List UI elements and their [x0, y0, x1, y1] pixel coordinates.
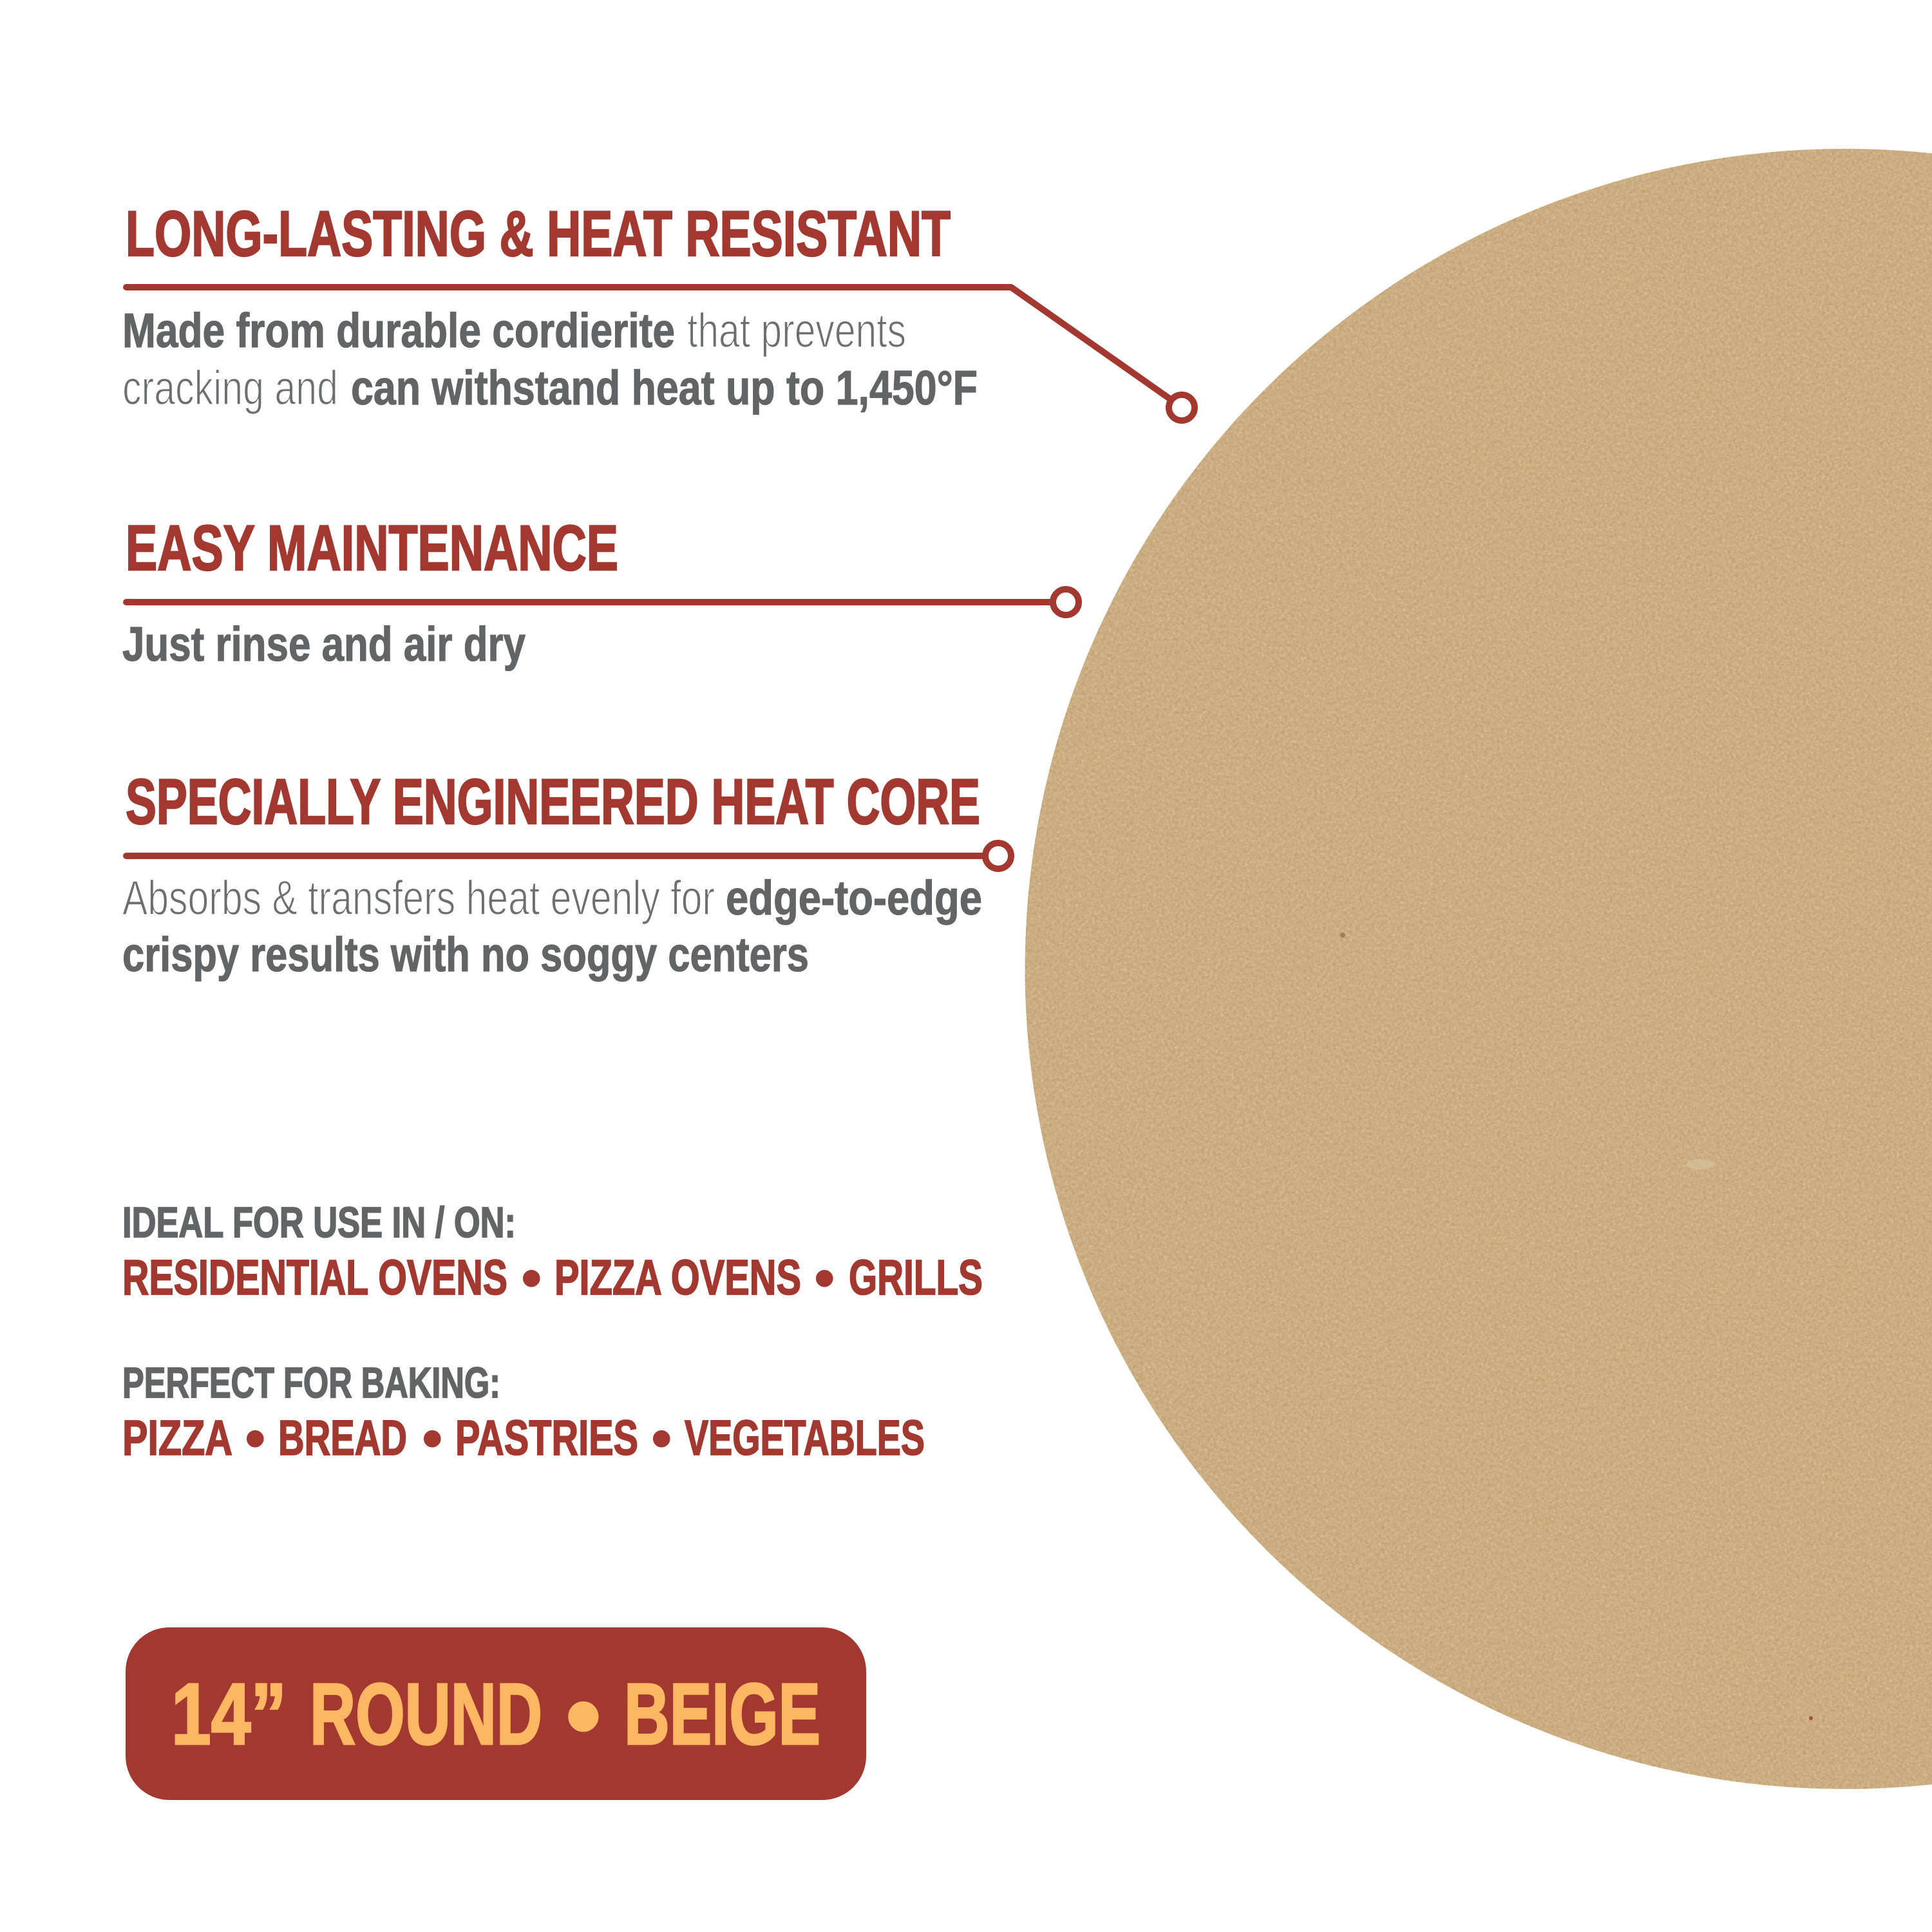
- list: foods: [122, 1405, 925, 1472]
- leader line with ring: long-lasting: [126, 287, 1195, 421]
- list: ovens and grills: •: [521, 1244, 542, 1311]
- list: ovens and grills: PIZZA OVENS: [554, 1250, 801, 1305]
- badge text: 14”: [171, 1665, 287, 1763]
- list: foods: •: [245, 1405, 266, 1472]
- body text: long-lasting: [122, 303, 978, 415]
- leader line with ring: easy maintenance: [126, 589, 1079, 615]
- callout: long-lasting and heat resistant: [122, 198, 1195, 421]
- body text: heat core: edge-to-edge: [726, 871, 982, 925]
- list: foods: PIZZA: [122, 1410, 232, 1466]
- list: foods: VEGETABLES: [685, 1410, 925, 1466]
- badge text: •: [565, 1656, 602, 1774]
- callout: easy maintenance: [122, 512, 1079, 671]
- body text: easy maintenance: Just rinse and air dry: [122, 617, 526, 671]
- perfect for baking list: [122, 1359, 925, 1472]
- list: foods: •: [651, 1405, 672, 1472]
- heading: easy maintenance: EASY MAINTENANCE: [126, 512, 618, 583]
- ideal for use list: [122, 1198, 983, 1311]
- size badge: [126, 1627, 866, 1800]
- body text: long-lasting: cracking and: [122, 361, 338, 415]
- list: ovens and grills: RESIDENTIAL OVENS: [122, 1250, 507, 1305]
- badge text: [171, 1656, 820, 1774]
- callout: heat core: [122, 766, 1011, 981]
- heading: heat core: SPECIALLY ENGINEERED HEAT CORE: [126, 766, 980, 837]
- list: foods: BREAD: [278, 1410, 407, 1466]
- pizza stone disc: [1024, 148, 1932, 1790]
- list: foods: PASTRIES: [455, 1410, 638, 1466]
- leader line with ring: heat core: [126, 843, 1011, 869]
- badge text: BEIGE: [624, 1665, 820, 1763]
- badge text: ROUND: [310, 1665, 542, 1763]
- body text: long-lasting: that prevents: [687, 303, 906, 357]
- body text: long-lasting: Made from durable cordierite: [122, 303, 675, 357]
- body text: heat core: [122, 871, 982, 981]
- body text: long-lasting: can withstand heat up to 1,450°F: [351, 361, 978, 415]
- list: ovens and grills: •: [814, 1244, 835, 1311]
- list: foods: •: [422, 1405, 443, 1472]
- list: ovens and grills: GRILLS: [849, 1250, 983, 1305]
- body text: heat core: crispy results with no soggy centers: [122, 927, 809, 981]
- body text: heat core: Absorbs & transfers heat evenly for: [122, 871, 715, 925]
- list: ovens and grills: [122, 1244, 983, 1311]
- label: ideal for use: IDEAL FOR USE IN / ON:: [122, 1198, 516, 1247]
- heading: long-lasting: LONG-LASTING & HEAT RESISTANT: [126, 198, 951, 269]
- label: perfect for baking: PERFECT FOR BAKING:: [122, 1359, 500, 1407]
